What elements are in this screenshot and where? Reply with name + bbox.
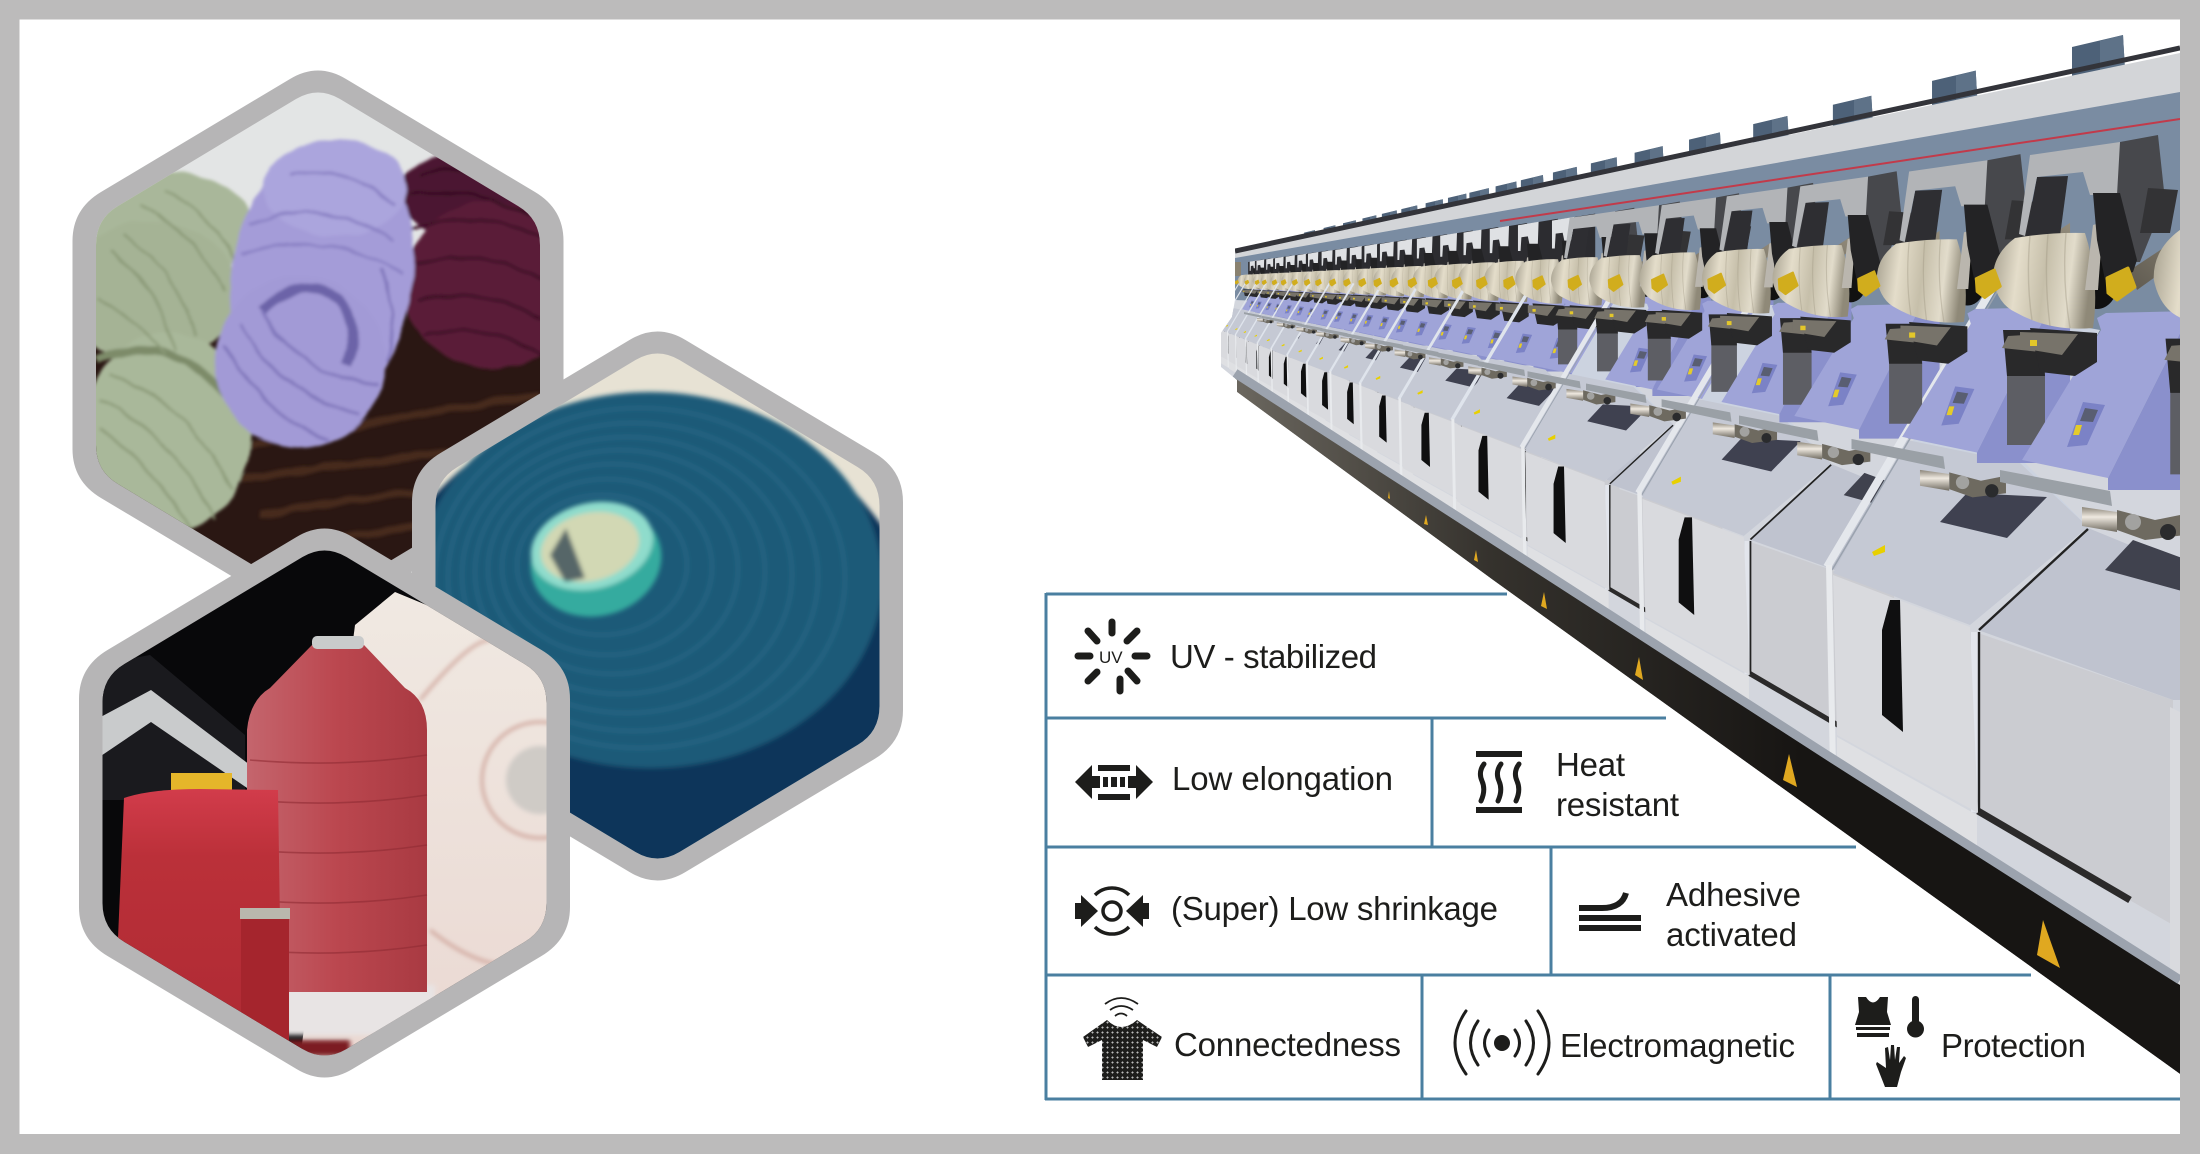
panel: hexagon photo of red thread spools (79, 528, 598, 1078)
label: UV stabilized: UV - stabilized (1170, 638, 1377, 675)
icon: glove hand (1876, 1045, 1906, 1087)
beam top edge (1235, 48, 2180, 251)
icon: heat waves (1476, 751, 1522, 813)
roof fins (1304, 35, 2125, 240)
red thread (1500, 119, 2180, 221)
label: electromagnetic: Electromagnetic (1560, 1027, 1795, 1064)
roller assemblies (1244, 312, 2185, 540)
warning triangles on base (1388, 491, 2060, 968)
machine body underlay (1221, 300, 2180, 968)
cell: super low shrinkage (1075, 888, 1498, 934)
label: adhesive activated: Adhesive (1666, 876, 1801, 913)
right edge casing sliver (2170, 707, 2173, 925)
icon: shrinkage (1075, 888, 1149, 934)
cell: electromagnetic (1455, 1011, 1795, 1074)
icon: UV sun: UV (1099, 648, 1123, 667)
label: heat resistant (1556, 746, 1679, 823)
yellow spindle knobs (1235, 268, 2135, 300)
cell: protection (1855, 996, 2086, 1087)
icon: adhesive layers (1579, 893, 1641, 931)
repeating spindle units from far to near (1213, 109, 2200, 925)
label: low elongation: Low elongation (1172, 760, 1393, 797)
table rules (1045, 593, 2180, 1100)
icon: thermometer (1907, 996, 1924, 1038)
label: heat resistant: resistant (1556, 786, 1679, 823)
cell: connectedness (1083, 998, 1401, 1080)
label: super low shrinkage: (Super) Low shrinkage (1171, 890, 1498, 927)
label: adhesive activated: activated (1666, 916, 1797, 953)
black machine base (1235, 378, 2180, 1074)
label: heat resistant: Heat (1556, 746, 1625, 783)
label: protection: Protection (1941, 1027, 2086, 1064)
rear blue-grey structure (1235, 90, 2180, 340)
icon: electromagnetic waves (1455, 1011, 1549, 1074)
cell: heat resistant (1476, 746, 1679, 823)
panel: hexagon photo of blue yarn cone (412, 332, 903, 880)
cell: adhesive activated (1579, 876, 1801, 953)
cell: UV stabilized (1078, 622, 1377, 691)
steel strip above base (1235, 373, 2180, 980)
icon: elongation arrows (1075, 765, 1153, 800)
panel: twisting machine (1213, 35, 2200, 1074)
far end cap (1235, 262, 1241, 276)
icon: smart shirt with wifi (1083, 998, 1162, 1080)
label: connectedness: Connectedness (1174, 1026, 1401, 1063)
label: adhesive activated (1666, 876, 1801, 953)
properties table (1045, 593, 2180, 1100)
icon: UV sun (1078, 622, 1147, 691)
top beam (1235, 53, 2180, 258)
panel: hexagon photo of yarn skeins (72, 70, 564, 576)
icon: protective vest (1855, 997, 1891, 1037)
cell: low elongation (1075, 760, 1393, 800)
